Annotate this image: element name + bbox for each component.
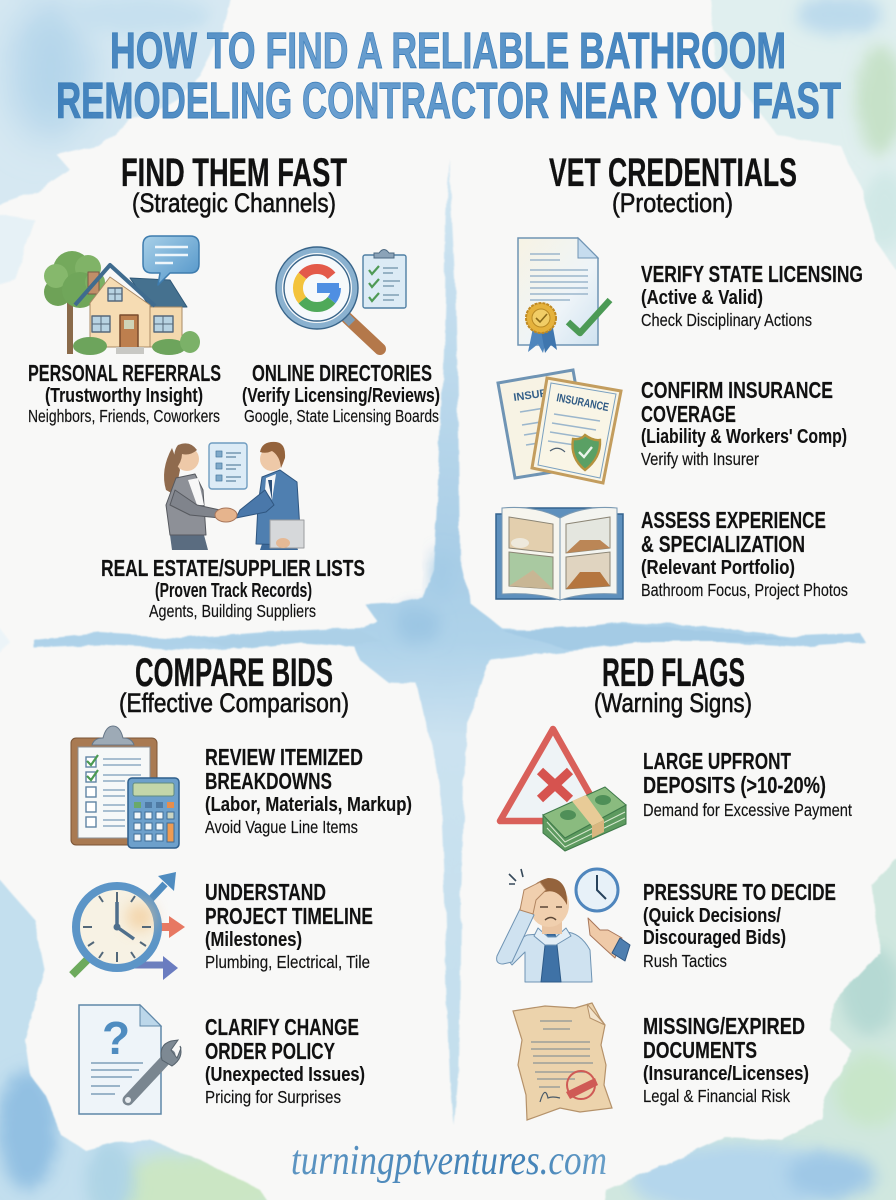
text: large upfront deposits: Demand for Excessive Payment — [643, 800, 852, 820]
text: clarify change order policy: CLARIFY CHANGE — [205, 1014, 359, 1040]
text: personal referrals — [28, 360, 221, 426]
text: pressure to decide: PRESSURE TO DECIDE — [643, 879, 836, 905]
icon: license document — [518, 238, 610, 353]
text: assess experience — [641, 507, 848, 600]
text: assess experience: Bathroom Focus, Project Photos — [641, 580, 848, 600]
text: missing expired documents: MISSING/EXPIRED — [643, 1013, 805, 1039]
woman — [164, 448, 180, 495]
heading: compare bids: COMPARE BIDS — [135, 651, 333, 695]
text: confirm insurance coverage: COVERAGE — [641, 401, 736, 427]
text: understand project timeline: (Milestones) — [205, 928, 302, 951]
heading: red flags — [594, 651, 752, 718]
text: verify state licensing: (Active & Valid) — [641, 286, 763, 309]
panel: red flags — [497, 651, 852, 1120]
icon: checklist clipboard — [363, 250, 406, 308]
text: pressure to decide: Rush Tactics — [643, 951, 727, 971]
heading: find them fast: FIND THEM FAST — [121, 151, 347, 195]
text: clarify change order policy: (Unexpected Issues) — [205, 1063, 365, 1086]
text: real estate supplier lists: REAL ESTATE/SUPPLIER LISTS — [101, 555, 365, 581]
heading: find them fast: (Strategic Channels) — [132, 188, 336, 218]
man — [260, 544, 298, 550]
text: confirm insurance coverage: CONFIRM INSURANCE — [641, 377, 833, 403]
text: pressure to decide: Discouraged Bids) — [643, 926, 786, 949]
heading: red flags: (Warning Signs) — [594, 688, 752, 718]
heading: compare bids — [119, 651, 349, 718]
icon: portfolio book — [496, 507, 623, 600]
icon: document with question mark and wrench: ? — [102, 1012, 130, 1064]
heading: red flags: RED FLAGS — [602, 651, 745, 695]
text: confirm insurance coverage — [641, 377, 847, 469]
text: personal referrals: (Trustworthy Insight) — [45, 384, 203, 407]
icon: insurance certificates — [498, 370, 621, 483]
text: personal referrals: Neighbors, Friends, Coworkers — [28, 406, 220, 426]
text: real estate supplier lists: (Proven Track Records) — [155, 579, 312, 602]
text: online directories — [242, 360, 440, 426]
text: review itemized breakdowns: REVIEW ITEMIZED — [205, 744, 363, 770]
text: online directories: Google, State Licensing Boards — [244, 406, 439, 426]
text: verify state licensing — [641, 261, 863, 330]
icon: clock — [576, 869, 618, 911]
icon: stressed man with clock — [497, 869, 630, 982]
text: review itemized breakdowns: Avoid Vague Line Items — [205, 817, 358, 837]
icon: handshake with checklist — [164, 442, 304, 550]
heading: vet credentials — [549, 151, 797, 218]
icon: house with speech bubble — [44, 236, 200, 355]
text: real estate supplier lists: Agents, Building Suppliers — [149, 601, 316, 621]
icon: torn expired document — [513, 1003, 612, 1120]
heading: find them fast — [121, 151, 347, 218]
text: online directories: (Verify Licensing/Reviews) — [242, 384, 440, 407]
text: understand project timeline: Plumbing, Electrical, Tile — [205, 952, 370, 972]
text: large upfront deposits: LARGE UPFRONT — [643, 748, 791, 774]
text: pressure to decide: (Quick Decisions/ — [643, 904, 781, 927]
text: online directories: ONLINE DIRECTORIES — [252, 360, 432, 386]
text: review itemized breakdowns — [205, 744, 412, 837]
icon: speech bubble — [143, 236, 199, 285]
text: review itemized breakdowns: (Labor, Materials, Markup) — [205, 793, 412, 816]
icon: pointing hand — [588, 918, 622, 958]
text: assess experience: (Relevant Portfolio) — [641, 556, 795, 579]
hands — [215, 508, 237, 522]
icon: insurance certificates: INSURANCE — [555, 392, 610, 414]
panel: compare bids — [71, 651, 412, 1114]
text: personal referrals: PERSONAL REFERRALS — [28, 360, 221, 386]
text: large upfront deposits — [643, 748, 852, 820]
text: missing expired documents: (Insurance/Licenses) — [643, 1062, 809, 1085]
text: assess experience: ASSESS EXPERIENCE — [641, 507, 826, 533]
text: pressure to decide — [643, 879, 836, 971]
icon: google magnifying glass and checklist — [276, 247, 406, 349]
icon: insurance certificates: INSURA — [513, 386, 556, 404]
title — [56, 22, 841, 129]
text: understand project timeline: UNDERSTAND — [205, 879, 326, 905]
text: missing expired documents: DOCUMENTS — [643, 1037, 757, 1063]
text: confirm insurance coverage: Verify with Insurer — [641, 449, 759, 469]
text: missing expired documents — [643, 1013, 809, 1106]
text: large upfront deposits: DEPOSITS (>10-20%) — [643, 772, 826, 798]
icon: clipboard and calculator — [71, 726, 179, 848]
icon: document with question mark and wrench — [79, 1005, 181, 1114]
text: real estate supplier lists — [101, 555, 365, 621]
heading: compare bids: (Effective Comparison) — [119, 688, 349, 718]
icon: warning triangle with money stack — [500, 729, 626, 851]
text: clarify change order policy: Pricing for Surprises — [205, 1087, 341, 1107]
text: review itemized breakdowns: BREAKDOWNS — [205, 768, 332, 794]
text: missing expired documents: Legal & Financial Risk — [643, 1086, 790, 1106]
panel: vet credentials — [496, 151, 863, 600]
text: verify state licensing: Check Disciplinary Actions — [641, 310, 812, 330]
icon: clock with arrows — [72, 872, 185, 980]
panel: find them fast — [28, 151, 440, 621]
text: assess experience: & SPECIALIZATION — [641, 531, 805, 557]
footer website: turningptventures.com — [291, 1138, 607, 1184]
text: clarify change order policy: ORDER POLICY — [205, 1038, 335, 1064]
text: understand project timeline: PROJECT TIMELINE — [205, 903, 373, 929]
text: clarify change order policy — [205, 1014, 365, 1107]
text: understand project timeline — [205, 879, 373, 972]
heading: vet credentials: (Protection) — [612, 188, 733, 218]
